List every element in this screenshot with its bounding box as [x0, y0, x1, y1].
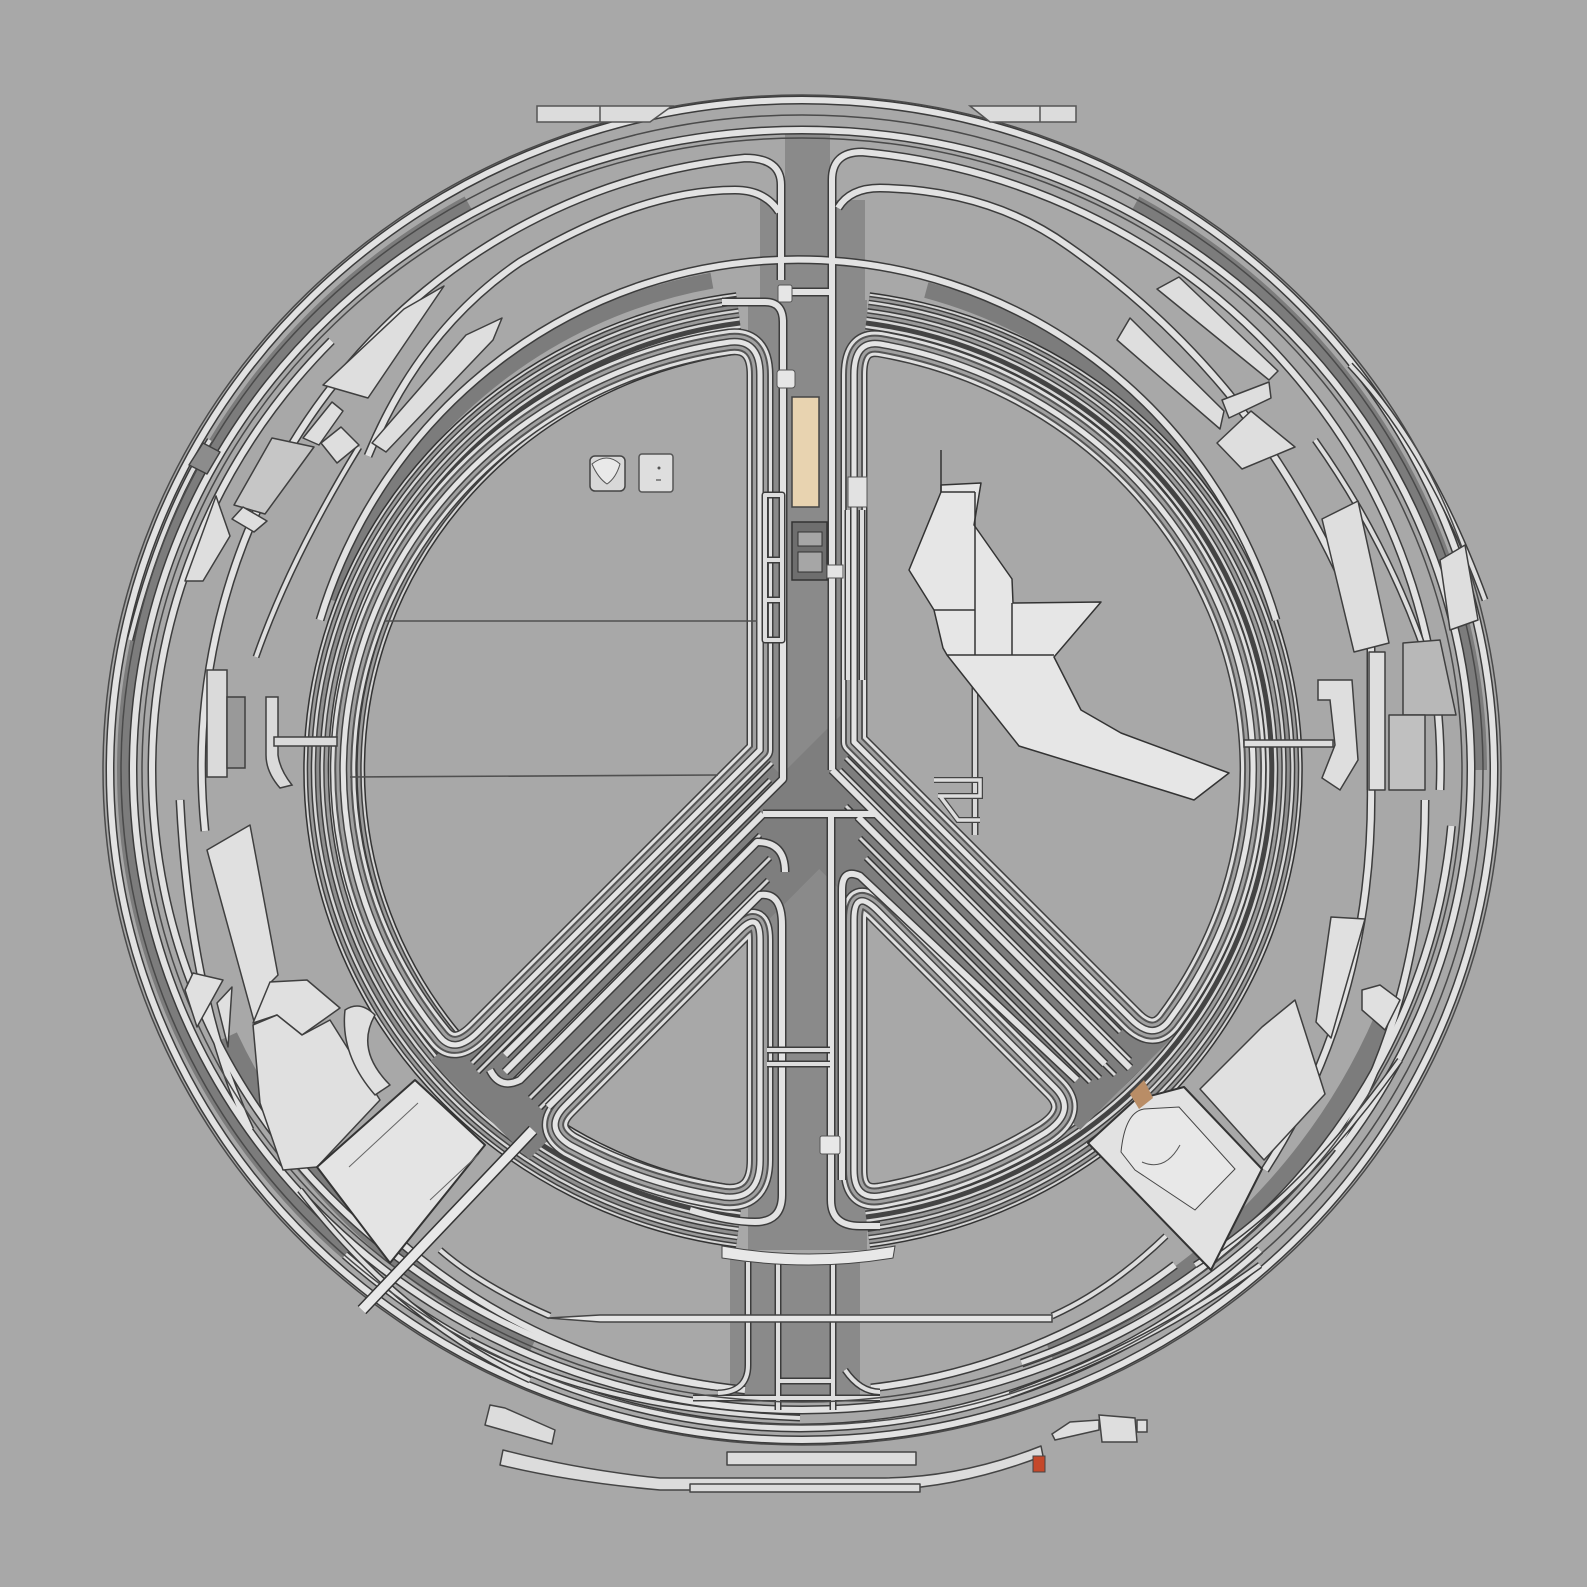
peace sign inner pipe stacks — [343, 342, 1253, 1197]
left bracket — [777, 370, 795, 388]
peace ring band — [334, 323, 1272, 1217]
arc plate — [722, 1246, 895, 1265]
dove post and bracket — [934, 650, 980, 835]
lower left strut — [362, 1130, 533, 1310]
lower horizontal bar — [548, 1315, 1052, 1322]
diagonal fine pipes — [472, 758, 1130, 1108]
right side bracket — [1244, 680, 1358, 790]
copper fitting — [1130, 1080, 1153, 1109]
fine ring lines — [103, 95, 1501, 1445]
top clamp bars — [537, 106, 1076, 122]
horizontal wires left panel — [350, 621, 757, 777]
left side brackets — [207, 670, 337, 788]
upper right machined blades — [1117, 277, 1478, 790]
lower left box — [317, 1080, 485, 1263]
small square icons — [590, 454, 673, 492]
red marker — [1033, 1456, 1045, 1472]
central fittings — [777, 285, 867, 1154]
mid clip — [827, 565, 843, 578]
lower left wing assembly — [185, 825, 390, 1170]
beige panel — [792, 397, 819, 507]
main pipes and outer rings — [110, 100, 1494, 1440]
dove — [909, 450, 1229, 800]
secondary pipes — [130, 365, 1485, 1418]
bottom connector — [1052, 1415, 1147, 1442]
control unit — [792, 522, 827, 580]
bottom loose pipes — [485, 1405, 1043, 1492]
dark infill rings — [124, 118, 1480, 1422]
upper junction — [778, 285, 792, 302]
diagonal dark backing — [480, 758, 1125, 1110]
right bracket — [848, 477, 867, 507]
lower clip — [820, 1136, 840, 1154]
central dark channel — [730, 130, 867, 1400]
control unit detail — [798, 532, 822, 572]
lower right box — [1088, 1087, 1262, 1270]
lower right wing — [1200, 917, 1400, 1160]
upper left machined blades — [185, 286, 502, 581]
